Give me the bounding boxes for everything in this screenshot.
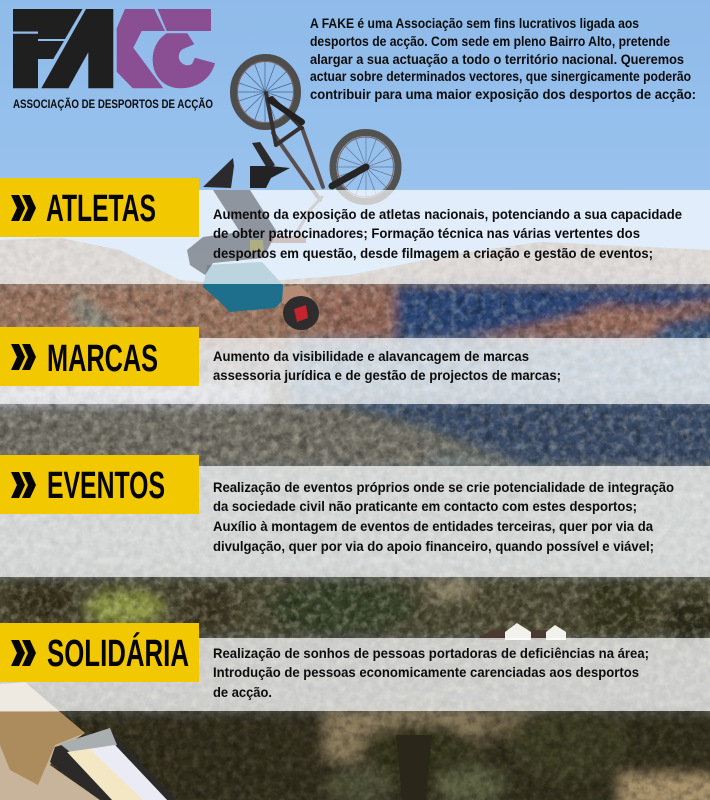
front wheel — [333, 132, 398, 202]
description text: de obter patrocinadores; Formação técnica nas várias vertentes dos — [213, 225, 640, 241]
heading: MARCAS — [47, 338, 158, 380]
description band — [0, 190, 710, 284]
helmet — [283, 296, 319, 330]
rock outcrop and ramp, bottom left — [0, 682, 176, 800]
description text: da sociedade civil não praticante em contacto com estes desportos; — [213, 498, 637, 514]
shirt — [203, 262, 283, 312]
heading: SOLIDÁRIA — [47, 631, 189, 675]
panel: eventos — [0, 455, 710, 577]
intro text — [310, 15, 696, 102]
description band — [0, 638, 710, 711]
icon: double chevron — [11, 195, 36, 221]
description text — [213, 645, 649, 700]
intro text: A FAKE é uma Associação sem fins lucrativos ligada aos — [310, 15, 639, 31]
seat — [252, 142, 275, 170]
rider — [203, 158, 319, 330]
icon: double chevron — [11, 472, 36, 498]
tree trunk — [396, 735, 432, 800]
panel: solidaria — [0, 623, 710, 711]
icon: double chevron — [11, 344, 36, 370]
description text — [213, 206, 682, 261]
tagline: ASSOCIAÇÃO DE DESPORTOS DE ACÇÃO — [13, 96, 213, 111]
yellow heading tab — [0, 455, 199, 514]
intro text: alargar a sua actuação a todo o território nacional. Queremos — [310, 51, 684, 67]
shoes — [203, 158, 234, 188]
letters F and A — [13, 9, 113, 88]
description text — [213, 348, 561, 383]
description band — [0, 466, 710, 577]
description text: desportos em questão, desde filmagem a criação e gestão de eventos; — [213, 245, 653, 261]
description text: Realização de sonhos de pessoas portadoras de deficiências na área; — [213, 645, 649, 661]
description text: divulgação, quer por via do apoio financeiro, quando possível e viável; — [213, 538, 654, 554]
houses — [480, 623, 566, 640]
description text: de acção. — [213, 684, 272, 700]
heading: EVENTOS — [47, 465, 165, 507]
panel: atletas — [0, 178, 710, 284]
frame — [266, 93, 366, 232]
logo: FAKE — [13, 9, 215, 111]
rider seen through band — [187, 190, 306, 275]
description text: Auxílio à montagem de eventos de entidades terceiras, quer por via da — [213, 518, 653, 534]
description text — [213, 479, 674, 554]
description text: assessoria jurídica e de gestão de projectos de marcas; — [213, 367, 561, 383]
rear wheel — [234, 58, 298, 126]
head — [282, 285, 312, 306]
description text: Aumento da exposição de atletas nacionais, potenciando a sua capacidade — [213, 206, 682, 222]
heading: ATLETAS — [46, 188, 156, 230]
description text: Introdução de pessoas economicamente carenciadas aos desportos — [213, 664, 639, 680]
yellow heading tab — [0, 327, 199, 386]
letter C — [153, 33, 215, 88]
icon: double chevron — [11, 640, 36, 666]
description text: Realização de eventos próprios onde se crie potencialidade de integração — [213, 479, 674, 495]
letter E bar — [158, 9, 211, 31]
description band — [0, 338, 710, 404]
panel: marcas — [0, 327, 710, 404]
yellow heading tab — [0, 623, 199, 682]
yellow heading tab — [0, 178, 199, 237]
letter K — [117, 9, 165, 88]
bmx bike — [234, 58, 398, 232]
description text: Aumento da visibilidade e alavancagem de marcas — [213, 348, 529, 364]
